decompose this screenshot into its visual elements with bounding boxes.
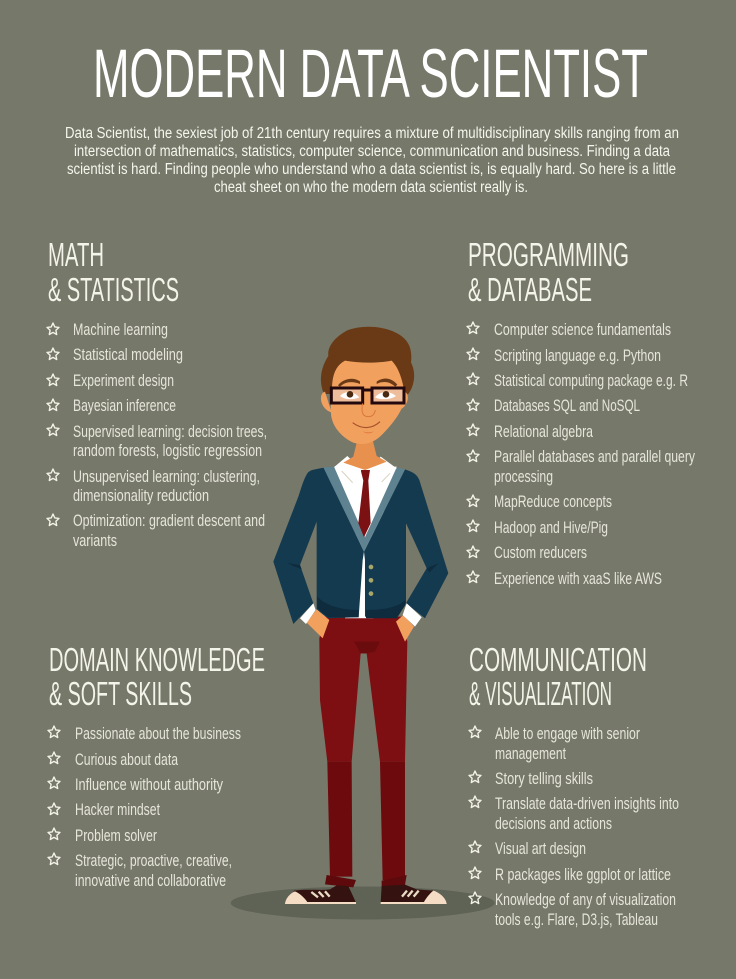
cuffs (300, 603, 422, 627)
jacket, shirt and tie (273, 456, 448, 642)
list: math and statistics (47, 321, 267, 550)
hair (321, 327, 414, 394)
list: domain knowledge and soft skills: innovative and collaborative (75, 872, 226, 890)
list: programming and database (467, 321, 696, 588)
list: communication and visualization: management (495, 745, 566, 763)
list: communication and visualization: Translate data-driven insights into (495, 795, 679, 813)
illustration: data scientist figure (231, 327, 495, 920)
list: communication and visualization: decisions and actions (495, 815, 612, 833)
list: programming and database: Experience with xaaS like AWS (494, 570, 662, 588)
heading: programming and database: & DATABASE (468, 271, 592, 308)
list: programming and database: Scripting language e.g. Python (494, 347, 661, 365)
list: programming and database: Hadoop and Hive/Pig (494, 519, 608, 537)
heading: communication and visualization (469, 641, 647, 712)
list: communication and visualization: R packages like ggplot or lattice (495, 866, 671, 884)
hands (307, 609, 414, 642)
list: math and statistics: random forests, logistic regression (73, 442, 262, 460)
lapel (323, 467, 405, 552)
list: domain knowledge and soft skills: Strategic, proactive, creative, (75, 852, 232, 870)
list: domain knowledge and soft skills: Problem solver (75, 827, 157, 845)
list: math and statistics: Experiment design (73, 372, 174, 390)
list: math and statistics: Machine learning (73, 321, 168, 339)
list: communication and visualization: tools e.g. Flare, D3.js, Tableau (495, 911, 658, 929)
list: programming and database: Computer science fundamentals (494, 321, 671, 339)
glasses (331, 388, 404, 403)
list: math and statistics: Statistical modeling (73, 346, 183, 364)
list: programming and database: Databases SQL and NoSQL (494, 397, 640, 415)
heading: domain knowledge and soft skills: & SOFT SKILLS (49, 675, 192, 712)
list: programming and database: processing (494, 468, 553, 486)
heading: math and statistics (48, 236, 179, 308)
list: math and statistics: Bayesian inference (73, 397, 176, 415)
heading: programming and database (468, 236, 629, 308)
trousers (319, 617, 407, 880)
heading: math and statistics: & STATISTICS (48, 271, 179, 308)
list: communication and visualization: Able to engage with senior (495, 725, 640, 743)
shoes (285, 875, 447, 904)
list: math and statistics: Optimization: gradient descent and (73, 512, 265, 530)
list: math and statistics: Unsupervised learning: clustering, (73, 468, 260, 486)
list: communication and visualization: Story telling skills (495, 770, 593, 788)
tie (358, 470, 371, 537)
heading: domain knowledge and soft skills (49, 641, 265, 712)
intro paragraph (65, 125, 679, 196)
list: math and statistics: variants (73, 532, 117, 550)
collar (335, 456, 397, 483)
neck (343, 440, 387, 470)
list: math and statistics: Supervised learning: decision trees, (73, 423, 267, 441)
list: programming and database: Custom reducers (494, 544, 587, 562)
list: programming and database: MapReduce concepts (494, 493, 612, 511)
eyebrows (338, 379, 397, 387)
intro paragraph: cheat sheet on who the modern data scientist really is. (214, 179, 528, 196)
jacket buttons (369, 565, 373, 569)
list: domain knowledge and soft skills: Influence without authority (75, 776, 224, 794)
jacket (273, 468, 364, 624)
shirt (334, 467, 397, 618)
list: programming and database: Relational algebra (494, 423, 594, 441)
nose and mouth (362, 403, 375, 417)
heading: programming and database: PROGRAMMING (468, 236, 629, 273)
ears (321, 392, 408, 413)
list: domain knowledge and soft skills: Passionate about the business (75, 725, 241, 743)
head (321, 327, 414, 470)
ground shadow (231, 886, 495, 920)
list: domain knowledge and soft skills (48, 725, 241, 890)
list: communication and visualization: Visual art design (495, 840, 586, 858)
list: communication and visualization: Knowledge of any of visualization (495, 891, 676, 909)
heading: math and statistics: MATH (48, 236, 104, 273)
list: domain knowledge and soft skills: Curious about data (75, 751, 179, 769)
heading: domain knowledge and soft skills: DOMAIN KNOWLEDGE (49, 641, 265, 678)
list: communication and visualization (469, 725, 679, 929)
list: domain knowledge and soft skills: Hacker mindset (75, 801, 160, 819)
list: math and statistics: dimensionality reduction (73, 487, 209, 505)
face (331, 361, 405, 444)
